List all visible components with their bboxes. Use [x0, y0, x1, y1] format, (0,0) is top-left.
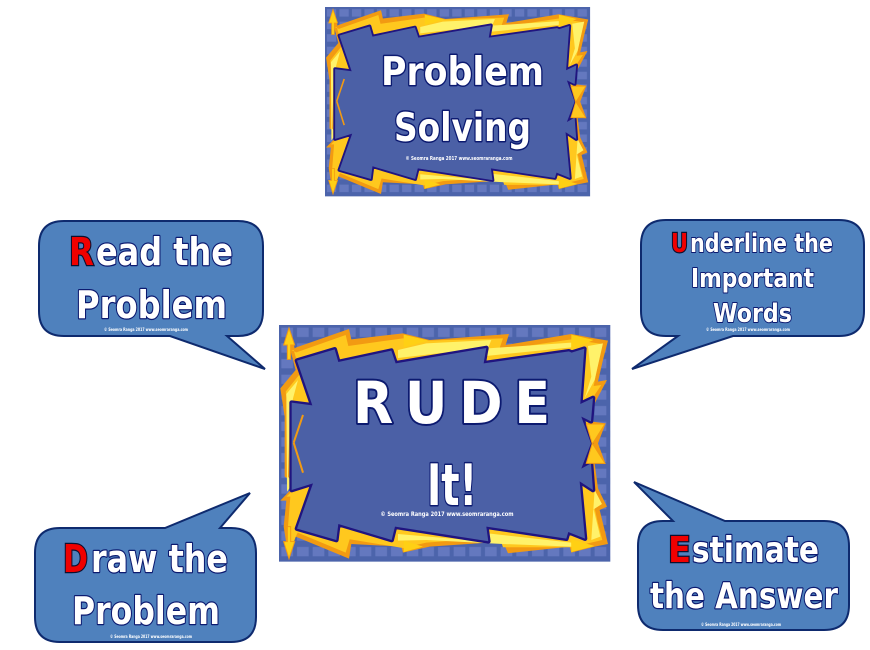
text: ead the: ead the	[96, 230, 233, 274]
heading: Solving: Solving	[394, 106, 531, 151]
panel: Problem Solving title card	[325, 7, 590, 196]
text: Important: Important	[691, 264, 814, 294]
red initial E: E	[668, 530, 691, 571]
text: raw the: raw the	[91, 537, 228, 581]
text: Problem: Problem	[72, 589, 220, 633]
text: Problem: Problem	[76, 283, 227, 327]
copyright: © Seomra Ranga 2017 www.seomraranga.com	[706, 327, 790, 332]
heading: RUDE: RUDE	[353, 370, 550, 438]
heading: Problem: Problem	[381, 50, 544, 95]
red initial R: R	[69, 230, 94, 274]
text: Words: Words	[713, 299, 792, 329]
panel: RUDE It! central card	[279, 325, 610, 562]
speech bubble: Estimate the Answer	[634, 482, 849, 630]
copyright: © Seomra Ranga 2017 www.seomraranga.com	[104, 327, 188, 332]
speech bubble: Draw the Problem	[35, 493, 256, 642]
copyright: © Seomra Ranga 2017 www.seomraranga.com	[110, 634, 192, 639]
speech bubble: Underline the Important Words	[632, 220, 864, 369]
copyright: © Seomra Ranga 2017 www.seomraranga.com	[380, 511, 514, 518]
copyright: © Seomra Ranga 2017 www.seomraranga.com	[406, 156, 512, 162]
heading: It!: It!	[427, 453, 477, 519]
red initial D: D	[63, 537, 88, 581]
copyright: © Seomra Ranga 2017 www.seomraranga.com	[701, 622, 781, 627]
text: stimate: stimate	[692, 530, 819, 571]
text: nderline the: nderline the	[690, 229, 833, 259]
red initial U: U	[671, 229, 688, 259]
speech bubble: Read the Problem	[39, 221, 265, 369]
